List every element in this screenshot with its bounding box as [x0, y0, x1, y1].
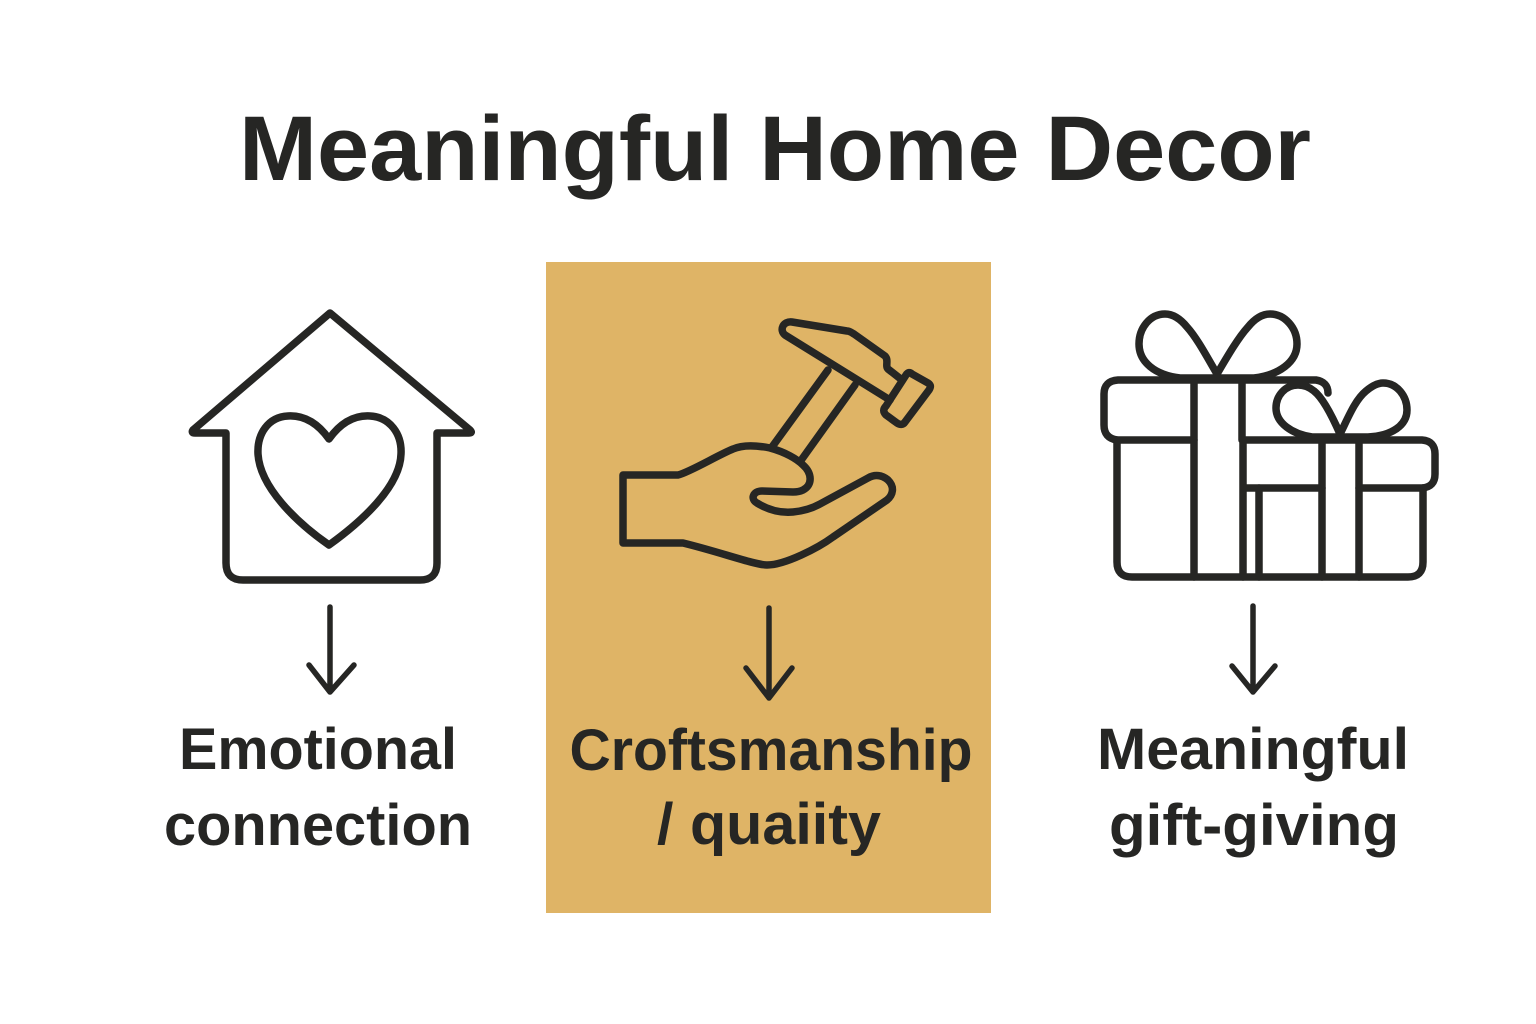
icon: house with heart: [192, 313, 471, 580]
arrow: gifts to meaningful gift-giving: [1232, 606, 1275, 692]
label: craftsmanship / quality: / quaiity: [657, 792, 881, 857]
label: emotional connection: [164, 717, 472, 858]
panel: craftsmanship highlight: [546, 262, 991, 913]
big gift body: [1117, 440, 1423, 577]
big bow: [1139, 314, 1297, 378]
arrow: hammer to craftsmanship: [746, 608, 792, 698]
big gift ribbon: [1194, 382, 1243, 577]
label: craftsmanship / quality: [570, 718, 972, 857]
label: meaningful gift-giving: Meaningful: [1097, 717, 1409, 782]
icon: two gift boxes: [1104, 314, 1435, 577]
label: meaningful gift-giving: gift-giving: [1109, 793, 1399, 858]
label: craftsmanship / quality: Croftsmanship: [570, 718, 972, 783]
small gift lid: [1243, 440, 1435, 488]
label: meaningful gift-giving: [1097, 717, 1409, 858]
small gift ribbon and body lines: [1259, 440, 1359, 577]
label: emotional connection: Emotional: [179, 717, 457, 782]
icon: hand holding hammer: [623, 322, 930, 565]
arrow: house to emotional connection: [309, 607, 354, 692]
big gift lid: [1104, 380, 1328, 440]
title: Meaningful Home Decor: [239, 98, 1311, 200]
label: emotional connection: connection: [164, 793, 472, 858]
small bow: [1276, 383, 1407, 437]
